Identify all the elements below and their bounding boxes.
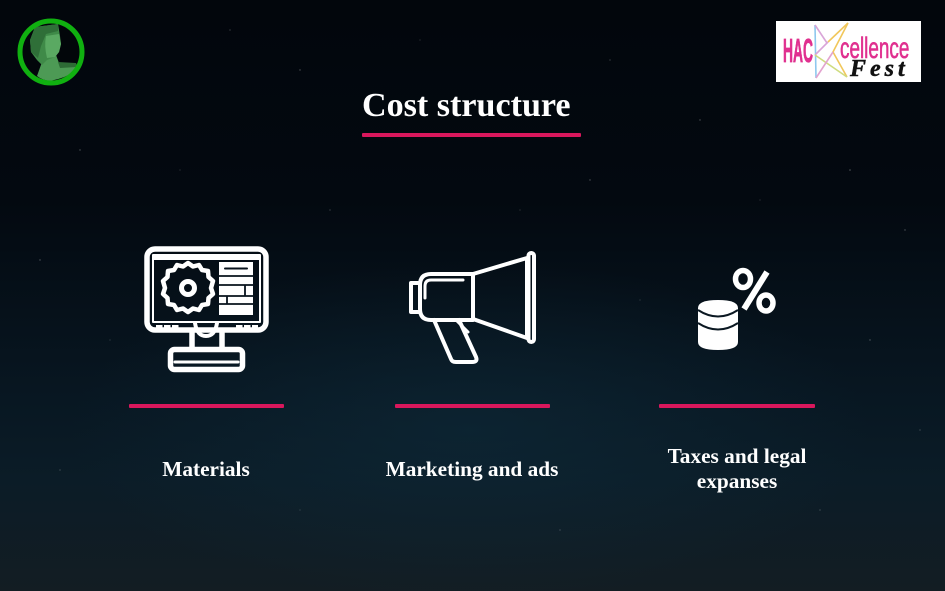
logo text cellence: cellence [840,32,909,65]
label: materials: Materials [162,457,250,481]
logo text HAC: HAC [783,32,813,69]
divider: marketing [395,404,550,408]
divider: taxes [659,404,815,408]
label: marketing and ads: Marketing and ads [386,457,558,481]
logo star [814,22,849,78]
title: Cost structure [362,87,571,124]
divider: materials [129,404,284,408]
title underline [362,133,581,137]
logo text Fest: Fest [850,56,909,82]
label: taxes and legal expanses [668,444,806,493]
logo: HACXcellence Fest [776,21,921,82]
label: taxes and legal expanses: Taxes and legal [668,444,806,468]
label: taxes and legal expanses: expanses [697,469,777,493]
